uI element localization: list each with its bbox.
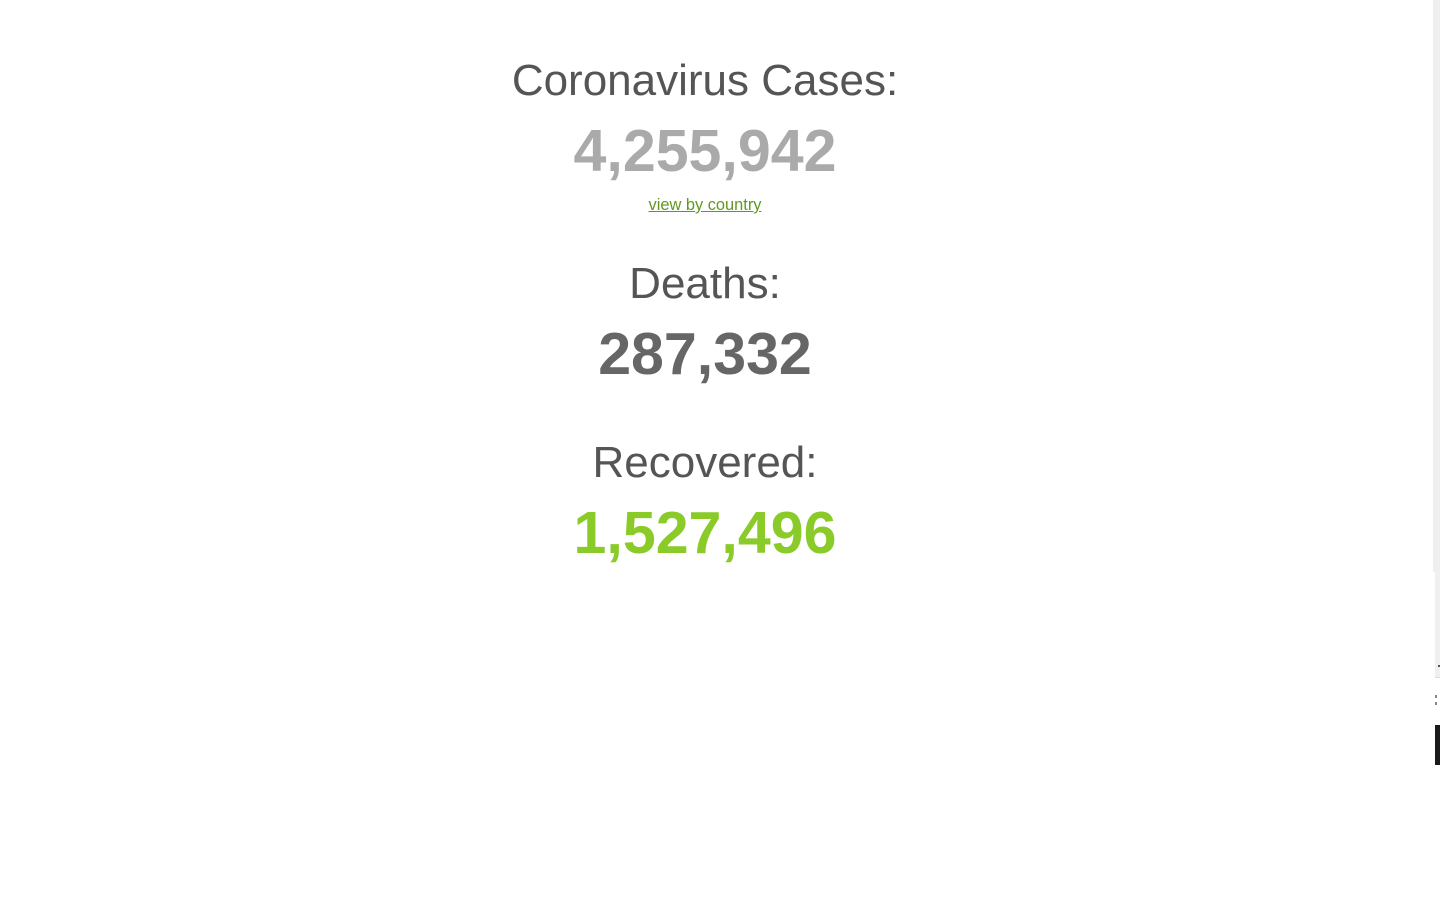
number: total recovered: 1,527,496: [574, 499, 836, 566]
sidebar: clipped right edge column: [1433, 0, 1440, 765]
heading: deaths: Deaths:: [629, 259, 781, 308]
link: view by country: view by country: [649, 196, 761, 214]
heading: coronavirus cases: Coronavirus Cases:: [512, 56, 898, 105]
number: total cases: 4,255,942: [574, 117, 836, 184]
number: total deaths: 287,332: [598, 320, 812, 387]
heading: recovered: Recovered:: [592, 438, 818, 487]
